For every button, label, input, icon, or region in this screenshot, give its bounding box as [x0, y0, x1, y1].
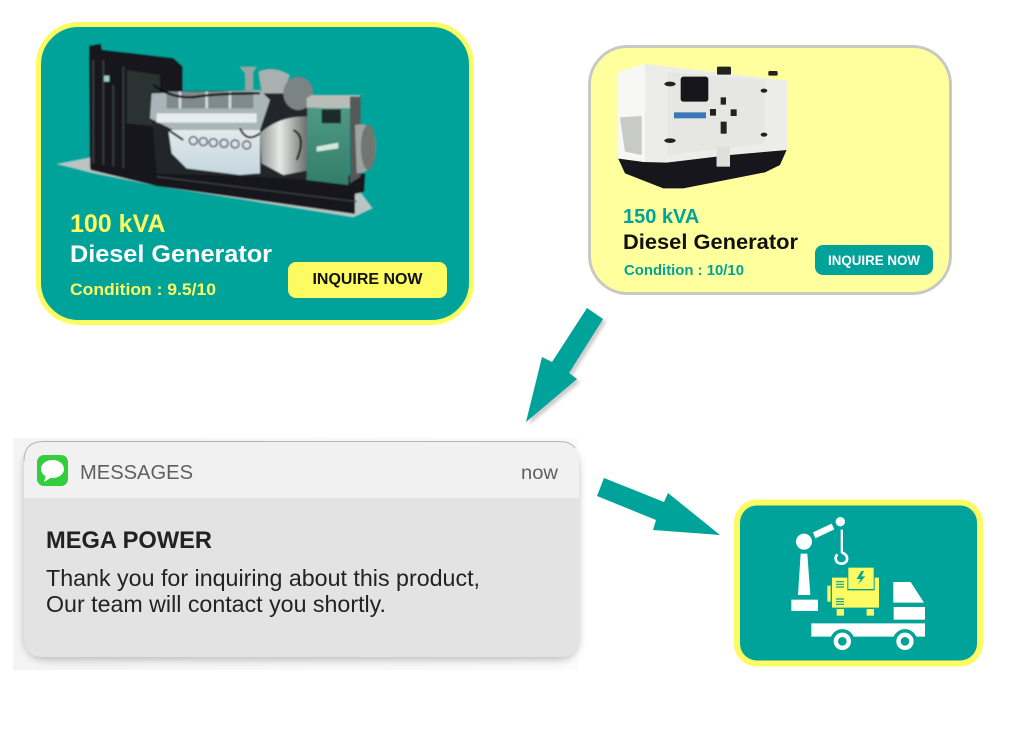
icon: messages app [37, 455, 68, 486]
text: product name: Diesel Generator [623, 231, 798, 254]
arrow: message to delivery [597, 478, 720, 535]
text: capacity: 150 kVA [623, 206, 699, 228]
panel: message notification [13, 438, 579, 670]
text: app name: MESSAGES [80, 462, 193, 484]
icon: crane loading generator on truck [791, 517, 925, 648]
button: inquire now: INQUIRE NOW [312, 271, 423, 288]
image: enclosed Perkins generator [617, 64, 787, 188]
text: product name: Diesel Generator [70, 241, 272, 268]
text: message body: Our team will contact you shortly. [46, 591, 386, 617]
text: timestamp: now [521, 463, 558, 484]
arrow: card to message [526, 308, 606, 425]
button: inquire now [288, 262, 447, 298]
text: condition: Condition : 9.5/10 [70, 281, 216, 299]
button: inquire now: INQUIRE NOW [828, 252, 921, 268]
panel: 150 kVA generator card [590, 46, 950, 294]
button: inquire now [815, 245, 933, 275]
panel: 100 kVA generator card [38, 24, 472, 322]
text: capacity: 100 kVA [70, 210, 165, 238]
text: condition: Condition : 10/10 [624, 262, 744, 279]
text: message body [46, 565, 480, 617]
panel: delivery icon card [737, 502, 980, 664]
text: message body: Thank you for inquiring about this product, [46, 565, 480, 591]
image: open diesel generator [56, 44, 376, 217]
text: sender: MEGA POWER [46, 527, 212, 554]
